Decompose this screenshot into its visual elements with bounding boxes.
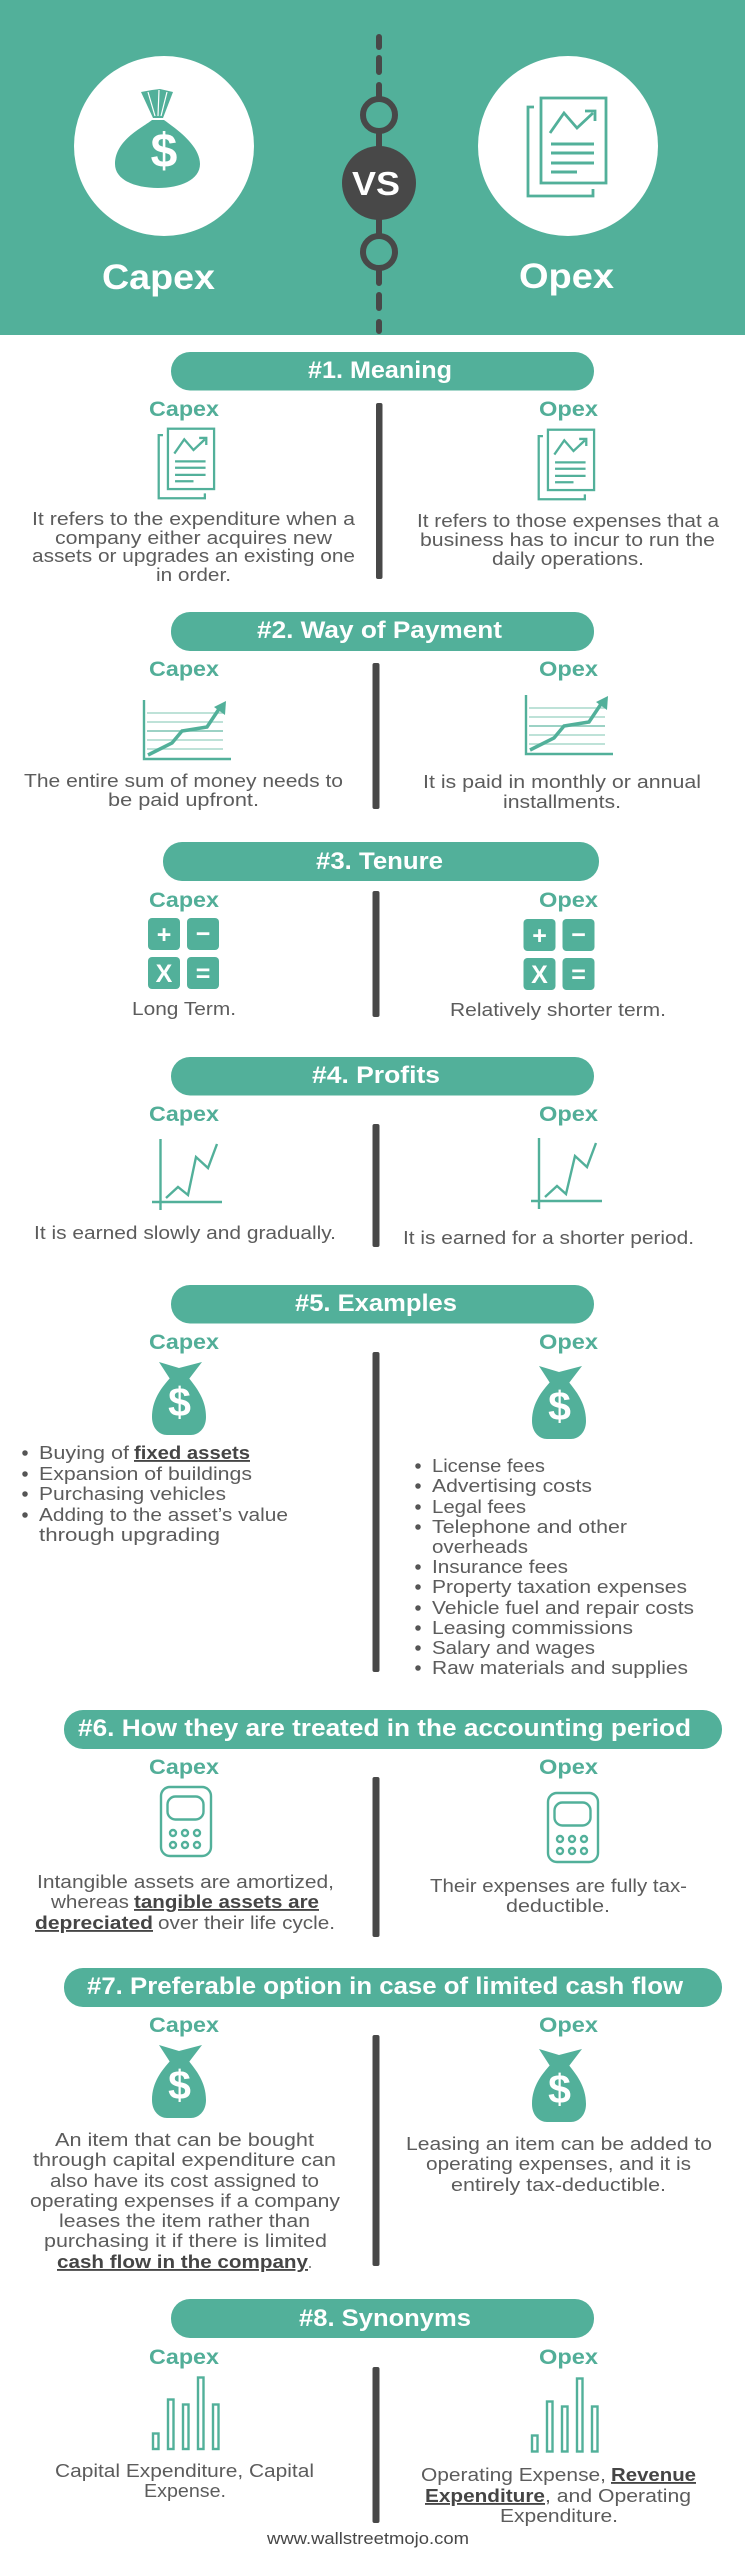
icon: calculator keys: X xyxy=(531,961,548,989)
list: capex examples: Expansion of buildings xyxy=(39,1463,252,1484)
panel: 3 tenure: Capex xyxy=(149,889,219,912)
list: capex examples: Purchasing vehicles xyxy=(39,1483,226,1504)
list: opex examples: Property taxation expenses xyxy=(432,1576,687,1597)
text: capex cash flow: purchasing it if there is limited xyxy=(44,2230,327,2251)
panel: 7 limited cash flow: Capex xyxy=(149,2014,219,2037)
text: opex cash flow: Leasing an item can be added to xyxy=(406,2133,712,2154)
text: capex synonyms: Expense. xyxy=(144,2480,226,2501)
text: capex accounting xyxy=(35,1871,335,1933)
text: capex cash flow: An item that can be bought xyxy=(55,2129,314,2150)
panel: 8 synonyms xyxy=(55,2299,696,2526)
icon: calculator keys: − xyxy=(571,921,586,949)
text: capex payment: The entire sum of money needs to xyxy=(24,770,343,791)
panel: 2 way of payment xyxy=(24,612,701,812)
text: capex cash flow: also have its cost assigned to xyxy=(50,2170,319,2191)
text: opex payment: It is paid in monthly or annual xyxy=(423,771,701,792)
text: capex accounting: over their life cycle. xyxy=(158,1912,335,1933)
list: capex examples xyxy=(25,1442,288,1545)
panel: 2 way of payment: #2. Way of Payment xyxy=(257,617,502,644)
text: capex payment xyxy=(24,770,343,810)
icon: money bag: $ xyxy=(168,2062,191,2108)
text: opex synonyms xyxy=(421,2464,696,2526)
text: capex cash flow: . xyxy=(308,2251,312,2272)
text: opex synonyms: Revenue xyxy=(611,2464,696,2485)
icon: money bag in white circle xyxy=(74,56,254,236)
text: capex accounting: depreciated xyxy=(35,1912,153,1933)
text: opex payment xyxy=(423,771,701,812)
text: capex meaning: in order. xyxy=(156,564,231,585)
panel: 8 synonyms: Capex xyxy=(149,2346,219,2369)
panel: 1 meaning: Capex xyxy=(149,398,219,421)
text: opex cash flow xyxy=(406,2133,712,2195)
text: opex meaning: daily operations. xyxy=(492,548,644,569)
text: opex meaning: It refers to those expenses that a xyxy=(417,510,720,531)
icon: calculator keys: − xyxy=(196,920,210,948)
panel: 2 way of payment: Opex xyxy=(539,658,598,681)
list: opex examples: Leasing commissions xyxy=(432,1617,633,1638)
text: capex meaning: assets or upgrades an existing one xyxy=(32,545,355,566)
list: opex examples: License fees xyxy=(432,1455,545,1476)
icon: calculator keys xyxy=(524,919,594,990)
icon: money bag xyxy=(532,1366,586,1439)
footer: website: www.wallstreetmojo.com xyxy=(266,2529,469,2548)
icon: money bag xyxy=(152,1362,206,1435)
panel: 2 way of payment: Capex xyxy=(149,658,219,681)
text: capex cash flow: through capital expenditure can xyxy=(33,2149,336,2170)
panel: 1 meaning xyxy=(32,352,720,585)
panel: 4 profits: Capex xyxy=(149,1103,219,1126)
text: capex profits: It is earned slowly and gradually. xyxy=(34,1222,336,1243)
icon: calculator device xyxy=(548,1793,598,1862)
icon: calculator keys: X xyxy=(156,960,173,988)
panel: 4 profits: Opex xyxy=(539,1103,598,1126)
text: opex synonyms: Operating Expense, xyxy=(421,2464,606,2485)
text: capex meaning xyxy=(32,508,356,585)
heading: Capex: Capex xyxy=(102,258,216,297)
panel: 7 limited cash flow xyxy=(30,1968,722,2272)
panel: 7 limited cash flow: Opex xyxy=(539,2014,598,2037)
text: opex synonyms: Expenditure xyxy=(425,2485,545,2506)
panel: 6 accounting period xyxy=(35,1710,722,1937)
icon: calculator keys: = xyxy=(196,960,210,988)
text: opex tenure: Relatively shorter term. xyxy=(450,999,666,1020)
text: capex synonyms xyxy=(55,2460,314,2501)
panel: 3 tenure: #3. Tenure xyxy=(316,848,443,875)
text: opex profits: It is earned for a shorter period. xyxy=(403,1227,694,1248)
list: capex examples: Buying of xyxy=(39,1442,130,1463)
list: opex examples: Telephone and other xyxy=(432,1516,627,1537)
text: opex accounting xyxy=(430,1875,687,1916)
text: opex accounting: Their expenses are fully tax- xyxy=(430,1875,687,1896)
list: opex examples: Advertising costs xyxy=(432,1475,592,1496)
icon: money bag in white circle: $ xyxy=(151,125,178,178)
panel: 7 limited cash flow: #7. Preferable option in case of limited cash flow xyxy=(87,1973,683,2000)
list: opex examples: Insurance fees xyxy=(432,1556,568,1577)
icon: money bag xyxy=(532,2049,586,2122)
panel: 3 tenure xyxy=(132,842,666,1020)
text: opex cash flow: operating expenses, and it is xyxy=(426,2153,691,2174)
text: opex synonyms: , and Operating xyxy=(545,2485,691,2506)
list: capex examples: fixed assets xyxy=(134,1442,250,1463)
text: capex synonyms: Capital Expenditure, Capital xyxy=(55,2460,314,2481)
icon: growth chart xyxy=(144,700,231,759)
list: opex examples: Raw materials and supplies xyxy=(432,1657,688,1678)
panel: 6 accounting period: #6. How they are treated in the accounting period xyxy=(78,1715,691,1742)
text: opex synonyms: Expenditure. xyxy=(500,2505,618,2526)
text: capex accounting: tangible assets are xyxy=(134,1891,319,1912)
panel: 3 tenure: Opex xyxy=(539,889,598,912)
text: capex meaning: It refers to the expenditure when a xyxy=(32,508,356,529)
text: opex meaning: business has to incur to run the xyxy=(420,529,715,550)
versus connector xyxy=(342,37,416,331)
text: capex accounting: whereas xyxy=(50,1891,129,1912)
list: capex examples: through upgrading xyxy=(39,1524,220,1545)
icon: calculator keys xyxy=(148,918,219,989)
panel: 8 synonyms: Opex xyxy=(539,2346,598,2369)
text: opex meaning xyxy=(417,510,720,569)
icon: report document in white circle xyxy=(478,56,658,236)
text: opex accounting: deductible. xyxy=(506,1895,610,1916)
text: capex cash flow: cash flow in the company xyxy=(57,2251,309,2272)
list: opex examples: Legal fees xyxy=(432,1496,526,1517)
icon: money bag: $ xyxy=(168,1379,191,1425)
panel: 4 profits: #4. Profits xyxy=(312,1062,440,1089)
header banner xyxy=(0,0,745,335)
panel: 6 accounting period: Opex xyxy=(539,1756,598,1779)
icon: line chart xyxy=(152,1139,222,1210)
panel: 5 examples: #5. Examples xyxy=(295,1290,457,1317)
text: capex meaning: company either acquires new xyxy=(55,527,333,548)
panel: 4 profits xyxy=(34,1057,694,1248)
text: capex cash flow: leases the item rather than xyxy=(59,2210,310,2231)
icon: line chart xyxy=(531,1138,602,1209)
list: opex examples: overheads xyxy=(432,1536,528,1557)
versus connector: VS xyxy=(352,165,400,202)
panel: 6 accounting period: Capex xyxy=(149,1756,219,1779)
heading: Opex: Opex xyxy=(519,257,615,296)
list: opex examples: Vehicle fuel and repair costs xyxy=(432,1597,694,1618)
panel: 5 examples: Capex xyxy=(149,1331,219,1354)
icon: bar chart xyxy=(532,2378,598,2452)
icon: document xyxy=(539,430,594,499)
panel: 1 meaning: #1. Meaning xyxy=(308,357,452,384)
panel: 5 examples xyxy=(25,1285,694,1678)
panel: 1 meaning: Opex xyxy=(539,398,598,421)
panel: 8 synonyms: #8. Synonyms xyxy=(299,2305,471,2332)
text: capex accounting: Intangible assets are amortized, xyxy=(37,1871,334,1892)
panel: 5 examples: Opex xyxy=(539,1331,598,1354)
text: capex tenure: Long Term. xyxy=(132,998,236,1019)
icon: calculator keys: + xyxy=(157,921,171,949)
text: capex payment: be paid upfront. xyxy=(108,789,259,810)
text: opex payment: installments. xyxy=(503,791,621,812)
text: capex cash flow: operating expenses if a company xyxy=(30,2190,341,2211)
text: capex cash flow xyxy=(30,2129,341,2272)
icon: bar chart xyxy=(153,2378,218,2449)
text: opex cash flow: entirely tax-deductible. xyxy=(451,2174,666,2195)
icon: growth chart xyxy=(526,695,613,754)
icon: calculator keys: + xyxy=(532,922,547,950)
icon: calculator keys: = xyxy=(571,961,586,989)
icon: money bag xyxy=(152,2045,206,2118)
list: opex examples: Salary and wages xyxy=(432,1637,595,1658)
icon: money bag: $ xyxy=(548,2066,571,2112)
icon: document xyxy=(159,429,214,498)
list: capex examples: Adding to the asset’s value xyxy=(39,1504,288,1525)
icon: money bag: $ xyxy=(548,1383,571,1429)
icon: calculator device xyxy=(161,1787,211,1856)
list: opex examples xyxy=(418,1455,694,1678)
